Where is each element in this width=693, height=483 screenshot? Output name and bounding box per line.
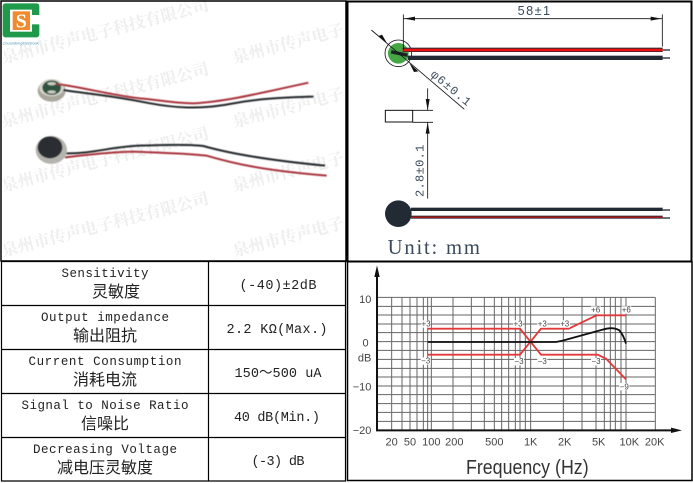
x axis labels: 500 bbox=[485, 437, 503, 449]
dimension: length 58±1 bbox=[403, 4, 662, 50]
row: current consumption: Current Consumption bbox=[28, 355, 182, 369]
row: output impedance: Output impedance bbox=[41, 311, 169, 325]
row: sensitivity: Sensitivity bbox=[62, 267, 149, 281]
logo: ChuandongElectronic bbox=[3, 41, 40, 45]
watermark text: 泉州市传声电子 bbox=[231, 84, 346, 131]
tolerance labels: −3 bbox=[421, 357, 431, 366]
watermark text: 泉州市传声电子 bbox=[231, 20, 346, 67]
panel border: photo bbox=[1, 1, 346, 261]
x axis labels: 200 bbox=[445, 437, 463, 449]
dimension: diameter 6±0.1: φ6±0.1 bbox=[427, 68, 473, 109]
logo: S bbox=[16, 11, 27, 33]
dimension: thickness 2.8±0.1: 2.8±0.1 bbox=[413, 145, 427, 197]
row: current consumption: 消耗电流 bbox=[73, 371, 137, 389]
y axis labels: dB bbox=[358, 352, 371, 364]
unit label: Unit: mm bbox=[388, 237, 480, 259]
logo bbox=[3, 3, 40, 45]
row: decreasing voltage: Decreasing Voltage bbox=[33, 443, 177, 457]
row: signal to noise ratio: Signal to Noise Ratio bbox=[22, 399, 188, 413]
upper and lower tolerance limits bbox=[428, 315, 626, 379]
tolerance labels: −9 bbox=[620, 382, 629, 391]
photo: black microphone with wires bbox=[36, 136, 327, 176]
row: sensitivity: (-40)±2dB bbox=[240, 279, 316, 294]
watermark text: 泉州市传声电子 bbox=[231, 149, 346, 196]
bottom view microphone with wires bbox=[385, 200, 670, 227]
top view microphone with wires bbox=[385, 40, 670, 67]
tolerance labels: −3 bbox=[591, 357, 601, 366]
y axis labels: −10 bbox=[353, 381, 371, 393]
dimension: length 58±1: 58±1 bbox=[518, 4, 550, 18]
row: output impedance: 2.2 KΩ(Max.) bbox=[226, 323, 328, 338]
dimension: diameter 6±0.1 bbox=[371, 30, 473, 109]
x axis labels: 100 bbox=[422, 437, 440, 449]
tolerance labels: +6 bbox=[591, 306, 601, 315]
x axis labels: 2K bbox=[558, 437, 572, 449]
watermark text: 泉州市传声电子 bbox=[231, 214, 346, 261]
row: decreasing voltage: (-3) dB bbox=[252, 455, 304, 470]
tolerance labels: +3 bbox=[513, 320, 523, 329]
tolerance labels: −3 bbox=[538, 357, 547, 366]
panel border: chart bbox=[348, 261, 692, 480]
x axis labels: 20K bbox=[645, 437, 665, 449]
panel border: dimension drawing bbox=[348, 2, 692, 262]
row: output impedance bbox=[41, 311, 328, 345]
y axis labels: 0 bbox=[363, 337, 369, 349]
axes bbox=[374, 265, 682, 433]
tolerance labels: +3 bbox=[560, 320, 570, 329]
watermark text bbox=[0, 0, 346, 261]
watermark text: 泉州市传声电子科技有限公司 bbox=[0, 189, 211, 261]
row: signal to noise ratio: 40 dB(Min.) bbox=[234, 411, 320, 426]
x axis labels: 1K bbox=[524, 437, 538, 449]
chart grid bbox=[377, 297, 655, 430]
row: current consumption: 150～500 uA bbox=[234, 367, 322, 382]
y axis labels bbox=[353, 294, 371, 437]
specification table bbox=[1, 261, 346, 482]
typical response curve bbox=[428, 328, 626, 344]
tolerance labels: +3 bbox=[421, 320, 431, 329]
x axis labels: 5K bbox=[592, 437, 606, 449]
row: sensitivity bbox=[62, 267, 316, 301]
x axis labels: 50 bbox=[404, 437, 416, 449]
panel: product photo bbox=[0, 0, 346, 261]
x axis title: Frequency (Hz) bbox=[466, 457, 589, 479]
watermark text: 泉州市传声电子科技有限公司 bbox=[0, 124, 211, 196]
row: decreasing voltage: 减电压灵敏度 bbox=[57, 459, 153, 477]
tolerance labels bbox=[421, 306, 631, 391]
row: decreasing voltage bbox=[33, 443, 304, 477]
row: sensitivity: 灵敏度 bbox=[92, 283, 140, 301]
panel: frequency response chart bbox=[353, 265, 682, 479]
y axis labels: −20 bbox=[353, 425, 371, 437]
x axis labels: 20 bbox=[386, 437, 398, 449]
tolerance labels: +6 bbox=[622, 306, 631, 315]
x axis labels bbox=[386, 437, 665, 449]
dimension: thickness 2.8±0.1 bbox=[385, 88, 433, 199]
row: signal to noise ratio bbox=[22, 399, 320, 433]
watermark text: 泉州市传声电子科技有限公司 bbox=[0, 59, 211, 131]
y axis labels: 10 bbox=[359, 294, 371, 306]
x axis labels: 10K bbox=[620, 437, 640, 449]
row: output impedance: 输出阻抗 bbox=[73, 327, 137, 345]
row: current consumption bbox=[28, 355, 322, 389]
table grid bbox=[1, 261, 346, 482]
tolerance labels: −3 bbox=[514, 357, 524, 366]
tolerance labels: +3 bbox=[538, 320, 547, 329]
photo: silver microphone with wires bbox=[38, 79, 313, 108]
panel: dimension drawing bbox=[371, 4, 670, 259]
row: signal to noise ratio: 信噪比 bbox=[81, 415, 129, 433]
